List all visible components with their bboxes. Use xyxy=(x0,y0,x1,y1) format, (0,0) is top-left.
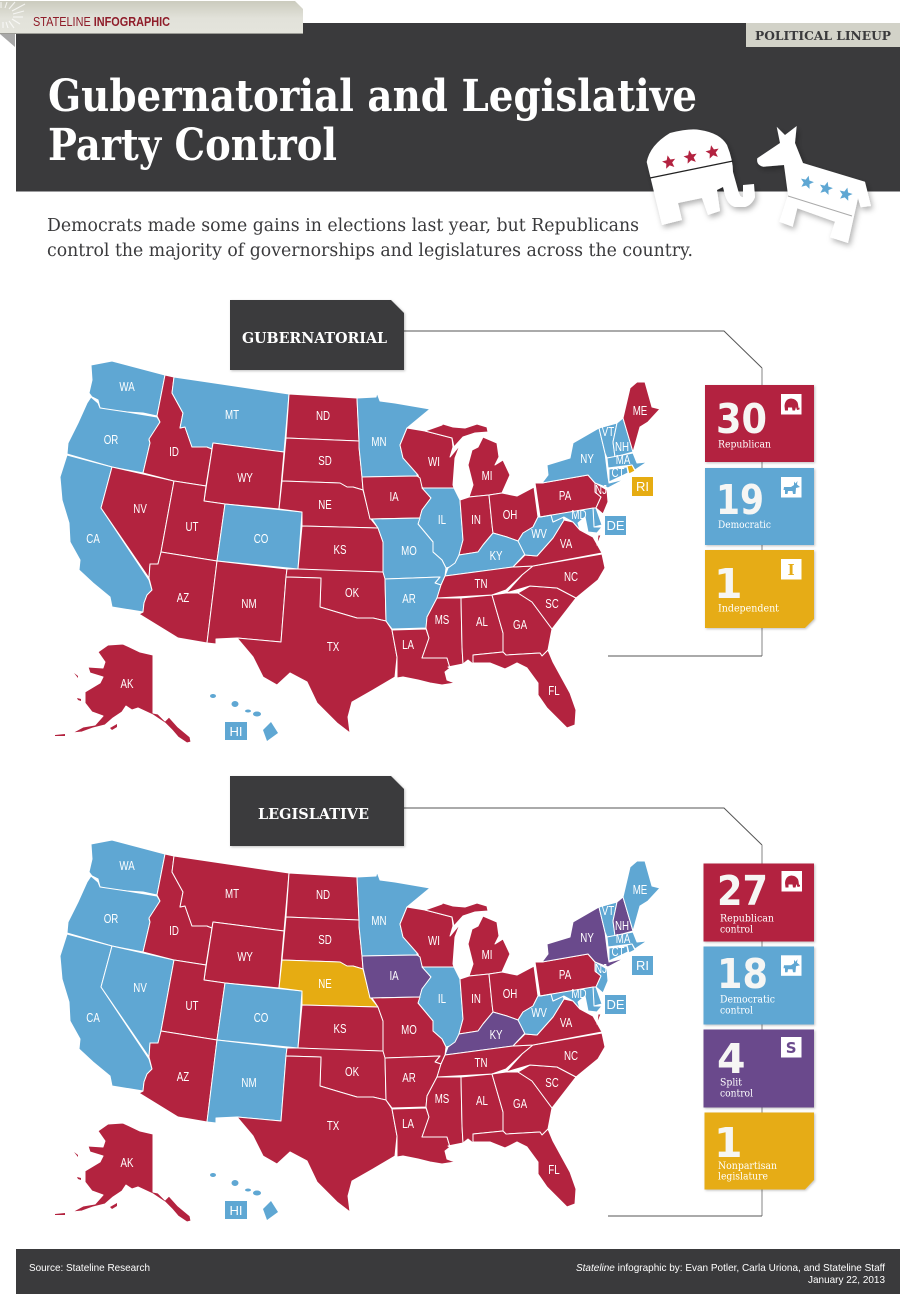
stat: 1 independent xyxy=(705,550,814,628)
state labels: VA xyxy=(560,538,573,551)
state: FL xyxy=(473,1129,576,1207)
state: NY xyxy=(542,907,625,967)
stat: 4 split control xyxy=(704,1030,814,1108)
state: PA xyxy=(535,475,601,517)
state: CT xyxy=(609,946,628,961)
label: HI xyxy=(225,722,247,740)
state: NJ xyxy=(595,483,608,514)
stat: 18 democratic control: 18 xyxy=(717,950,768,998)
state labels: AZ xyxy=(177,592,189,605)
state labels: AK xyxy=(121,1157,134,1170)
state: SC xyxy=(518,1065,576,1108)
state labels: NE xyxy=(318,978,332,991)
stat: 30 republican xyxy=(705,385,814,462)
state labels: NV xyxy=(133,503,147,516)
connector: legislative xyxy=(404,808,762,1216)
state labels: TX xyxy=(327,1120,340,1133)
credits: Stateline infographic by: Evan Potler, Carla Uriona, and Stateline Staff xyxy=(576,1263,885,1274)
ribbon: stateline infographic: STATELINE INFOGRAPHIC xyxy=(33,14,171,29)
state: TN xyxy=(437,566,533,598)
icon: elephant xyxy=(782,871,802,892)
state: ME xyxy=(623,861,660,931)
stat: 18 democratic control: Democratic xyxy=(720,994,775,1006)
icon: split: S xyxy=(786,1039,797,1057)
connector: gubernatorial xyxy=(404,331,762,656)
state: AR xyxy=(385,577,441,629)
title: Party Control xyxy=(48,120,337,171)
stat: 1 independent: Independent xyxy=(718,604,779,614)
state: WY xyxy=(204,443,284,509)
state: GA xyxy=(492,1072,552,1135)
state: VA xyxy=(513,999,602,1046)
stat: 27 republican control xyxy=(704,864,814,942)
state: VT xyxy=(599,423,617,458)
state: OR xyxy=(67,397,160,473)
state labels: IL xyxy=(438,514,446,527)
label: RI xyxy=(632,477,653,496)
icon: donkey xyxy=(781,955,802,976)
state: IN xyxy=(459,495,493,555)
state labels: GA xyxy=(513,1098,528,1111)
state labels: MO xyxy=(401,1024,417,1037)
heading: gubernatorial: GUBERNATORIAL xyxy=(242,329,387,347)
state: MI upper xyxy=(425,416,488,447)
label: HI xyxy=(225,1201,247,1219)
heading: legislative: LEGISLATIVE xyxy=(258,805,369,823)
label: HI: HI xyxy=(230,1203,242,1218)
state labels: KS xyxy=(334,544,346,557)
state: DE xyxy=(593,987,602,1006)
state: KY xyxy=(445,533,526,576)
state labels: CT xyxy=(612,946,625,959)
credits xyxy=(576,1263,885,1286)
state labels: NY xyxy=(580,453,594,466)
state labels xyxy=(86,381,647,698)
state: MD xyxy=(540,987,602,1012)
state: SC xyxy=(518,586,576,629)
state: VT xyxy=(599,902,617,937)
state: AZ xyxy=(139,1031,217,1122)
state labels: WI xyxy=(428,935,440,948)
state labels: MA xyxy=(616,454,631,467)
state: OK xyxy=(286,1048,386,1100)
state: LA xyxy=(392,1108,455,1164)
state labels: CA xyxy=(86,533,100,546)
state labels: FL xyxy=(548,685,560,698)
state: MI xyxy=(468,916,510,976)
state labels: ME xyxy=(633,884,647,897)
state: MN xyxy=(357,393,430,477)
state labels: MD xyxy=(571,509,587,522)
state: MT xyxy=(172,377,289,452)
state: UT xyxy=(161,481,225,561)
state labels: VT xyxy=(602,905,614,918)
state: WA xyxy=(89,361,165,416)
state labels: MO xyxy=(401,545,417,558)
state labels: OH xyxy=(503,988,517,1001)
state labels: WY xyxy=(237,951,253,964)
state labels: MN xyxy=(371,915,387,928)
state: ND xyxy=(286,394,359,441)
state labels: SD xyxy=(318,455,332,468)
icon: independent: I xyxy=(788,561,795,579)
state: VA xyxy=(513,520,602,567)
state: AL xyxy=(461,1074,503,1143)
state labels: WV xyxy=(531,528,547,541)
state: MO xyxy=(372,518,446,585)
state: CO xyxy=(217,983,302,1048)
state: SD xyxy=(282,917,363,969)
label: RI: RI xyxy=(636,479,649,494)
state: NM xyxy=(207,1040,287,1123)
state: IL xyxy=(418,488,463,568)
state labels: NY xyxy=(580,932,594,945)
state: IA xyxy=(362,955,431,998)
state: TX xyxy=(237,1056,397,1212)
state: AR xyxy=(385,1056,441,1108)
state: WV xyxy=(518,515,564,556)
state: IL xyxy=(418,967,463,1047)
state labels: NH xyxy=(615,441,629,454)
stat: 19 democratic: Democratic xyxy=(718,520,771,531)
state: MO xyxy=(372,997,446,1064)
state: ME xyxy=(623,382,660,452)
stat: 18 democratic control xyxy=(704,946,814,1024)
state: MA xyxy=(607,932,647,949)
hawaii islands xyxy=(210,694,278,741)
label: DE xyxy=(605,995,626,1014)
stat: 1 nonpartisan legislature: 1 xyxy=(714,1119,743,1167)
state: VA eastern shore xyxy=(597,535,601,545)
state labels: TX xyxy=(327,641,340,654)
state: ID xyxy=(143,854,212,965)
stat: 1 nonpartisan legislature xyxy=(704,1112,814,1190)
state: MI xyxy=(468,437,510,497)
state: NV xyxy=(101,467,174,578)
state: CA xyxy=(60,455,152,612)
alaska islands xyxy=(55,1152,117,1215)
state: CT xyxy=(609,467,628,482)
state labels: VA xyxy=(560,1017,573,1030)
state: NH xyxy=(613,418,633,457)
title xyxy=(48,71,697,171)
state labels: FL xyxy=(548,1164,560,1177)
state: NY xyxy=(542,428,625,488)
stat: 30 republican: Republican xyxy=(718,440,772,450)
hawaii islands xyxy=(210,1173,278,1220)
tab: political lineup: POLITICAL LINEUP xyxy=(755,28,892,43)
state labels: CO xyxy=(254,1012,269,1025)
state labels: WA xyxy=(119,860,135,873)
state: KS xyxy=(298,526,383,572)
state labels: UT xyxy=(186,521,199,534)
icon: elephant xyxy=(781,394,802,414)
state labels: IA xyxy=(389,491,399,504)
state labels: MA xyxy=(616,933,631,946)
state labels: MN xyxy=(371,436,387,449)
stat: 4 split control: control xyxy=(720,1088,753,1100)
state labels: PA xyxy=(559,969,572,982)
state labels: NC xyxy=(564,571,578,584)
state labels: NM xyxy=(241,1077,257,1090)
state labels: LA xyxy=(402,639,414,652)
state: MN xyxy=(357,872,430,956)
state: WA xyxy=(89,840,165,895)
stat: 1 nonpartisan legislature: legislature xyxy=(718,1172,768,1182)
label: RI xyxy=(632,956,653,975)
state labels: MS xyxy=(435,1093,449,1106)
state labels: NE xyxy=(318,499,332,512)
state: CA xyxy=(60,934,152,1091)
intro text: Democrats made some gains in elections last year, but Republicans xyxy=(47,216,639,236)
icon: republican elephant xyxy=(647,129,755,225)
stat: 1 nonpartisan legislature: Nonpartisan xyxy=(718,1161,778,1172)
stat: 4 split control: Split xyxy=(720,1078,742,1088)
state: GA xyxy=(492,593,552,656)
heading: legislative xyxy=(230,776,404,846)
stat: 27 republican control: 27 xyxy=(717,867,768,915)
state labels: LA xyxy=(402,1118,414,1131)
state labels: NJ xyxy=(595,484,607,497)
stat: 27 republican control: control xyxy=(720,924,753,936)
state labels: WV xyxy=(531,1007,547,1020)
heading: gubernatorial xyxy=(230,300,404,370)
label: HI: HI xyxy=(230,724,242,739)
state: CO xyxy=(217,504,302,569)
state labels: SC xyxy=(545,1077,559,1090)
intro text xyxy=(47,216,693,261)
state: NC xyxy=(506,554,605,598)
state: NC xyxy=(506,1033,605,1077)
state labels: AL xyxy=(476,616,488,629)
stat: 4 split control: 4 xyxy=(717,1035,746,1083)
state: OH xyxy=(489,487,538,541)
state: NV xyxy=(101,946,174,1057)
state: MS xyxy=(422,1077,463,1147)
state: NE xyxy=(279,481,378,528)
state: AK xyxy=(72,644,191,743)
stat: 30 republican: 30 xyxy=(716,395,767,443)
state: RI xyxy=(627,465,635,474)
state labels: OR xyxy=(104,434,118,447)
state labels: NC xyxy=(564,1050,578,1063)
footer xyxy=(16,1249,900,1294)
state: VA eastern shore xyxy=(597,1014,601,1024)
tab: political lineup xyxy=(746,23,900,47)
state: MA xyxy=(607,453,647,470)
state: NM xyxy=(207,561,287,644)
state labels: AZ xyxy=(177,1071,189,1084)
state: IA xyxy=(362,476,431,519)
state: LA xyxy=(392,629,455,685)
state: NH xyxy=(613,897,633,936)
icon: donkey xyxy=(781,477,802,498)
state labels: CA xyxy=(86,1012,100,1025)
state labels: KS xyxy=(334,1023,346,1036)
state labels: MD xyxy=(571,988,587,1001)
state labels: NJ xyxy=(595,963,607,976)
source: Source: Stateline Research xyxy=(29,1263,150,1274)
stat: 18 democratic control: control xyxy=(720,1006,753,1016)
state labels: ID xyxy=(169,925,179,938)
title banner xyxy=(16,23,900,192)
state labels: AR xyxy=(402,593,416,606)
state: IN xyxy=(459,974,493,1034)
state: MD xyxy=(540,508,602,533)
state: WV xyxy=(518,994,564,1035)
state labels: ID xyxy=(169,446,179,459)
state labels: TN xyxy=(475,1057,487,1070)
state: AK xyxy=(72,1123,191,1222)
state labels: SC xyxy=(545,598,559,611)
state labels: WY xyxy=(237,472,253,485)
state: OH xyxy=(489,966,538,1020)
stat: 19 democratic: 19 xyxy=(716,476,764,524)
state: TX xyxy=(237,577,397,733)
map: legislative xyxy=(55,840,660,1222)
state labels: UT xyxy=(186,1000,199,1013)
ribbon: stateline infographic xyxy=(0,1,303,47)
state: NJ xyxy=(595,962,608,993)
state labels: NV xyxy=(133,982,147,995)
state labels: NM xyxy=(241,598,257,611)
state: OK xyxy=(286,569,386,621)
state: WY xyxy=(204,922,284,988)
state labels: KY xyxy=(490,1029,503,1042)
state labels xyxy=(86,860,647,1177)
state: PA xyxy=(535,954,601,996)
state labels: VT xyxy=(602,426,614,439)
state labels: ND xyxy=(316,410,330,423)
state: MS xyxy=(422,598,463,668)
state: FL xyxy=(473,650,576,728)
state labels: OK xyxy=(345,1066,360,1079)
state: WI xyxy=(400,428,460,488)
state labels: MI xyxy=(482,949,492,962)
state labels: WA xyxy=(119,381,135,394)
state labels: NH xyxy=(615,920,629,933)
state labels: ME xyxy=(633,405,647,418)
state labels: MT xyxy=(225,409,239,422)
label: DE xyxy=(605,516,626,535)
state: AZ xyxy=(139,552,217,643)
state labels: MS xyxy=(435,614,449,627)
state labels: IN xyxy=(471,993,481,1006)
state labels: MT xyxy=(225,888,239,901)
state labels: AL xyxy=(476,1095,488,1108)
label: DE: DE xyxy=(606,997,625,1012)
state: UT xyxy=(161,960,225,1040)
state: AL xyxy=(461,595,503,664)
state: WI xyxy=(400,907,460,967)
icon: democratic donkey xyxy=(757,126,871,243)
state labels: GA xyxy=(513,619,528,632)
state labels: CT xyxy=(612,467,625,480)
state: KS xyxy=(298,1005,383,1051)
state: RI xyxy=(627,944,635,953)
state: TN xyxy=(437,1045,533,1077)
alaska islands xyxy=(55,673,117,736)
state labels: WI xyxy=(428,456,440,469)
state: ID xyxy=(143,375,212,486)
state: OR xyxy=(67,876,160,952)
state labels: IN xyxy=(471,514,481,527)
state labels: AR xyxy=(402,1072,416,1085)
state labels: SD xyxy=(318,934,332,947)
state: SD xyxy=(282,438,363,490)
label: RI: RI xyxy=(636,958,649,973)
state: ND xyxy=(286,873,359,920)
state: MI upper xyxy=(425,895,488,926)
state labels: MI xyxy=(482,470,492,483)
state: KY xyxy=(445,1012,526,1055)
stat: 27 republican control: Republican xyxy=(720,914,775,924)
state labels: OR xyxy=(104,913,118,926)
state labels: IL xyxy=(438,993,446,1006)
state labels: KY xyxy=(490,550,503,563)
state labels: OK xyxy=(345,587,360,600)
label: DE: DE xyxy=(606,518,625,533)
map: gubernatorial xyxy=(55,361,660,743)
state: DE xyxy=(593,508,602,527)
state labels: TN xyxy=(475,578,487,591)
state labels: ND xyxy=(316,889,330,902)
state labels: AK xyxy=(121,678,134,691)
credits: January 22, 2013 xyxy=(808,1275,885,1286)
state labels: PA xyxy=(559,490,572,503)
stat: 19 democratic xyxy=(705,468,814,545)
state: NE xyxy=(279,960,378,1007)
state: MT xyxy=(172,856,289,931)
intro text: control the majority of governorships and legislatures across the country. xyxy=(47,241,693,261)
state labels: IA xyxy=(389,970,399,983)
state labels: OH xyxy=(503,509,517,522)
title: Gubernatorial and Legislative xyxy=(48,71,697,122)
stat: 1 independent: 1 xyxy=(714,560,743,608)
state labels: CO xyxy=(254,533,269,546)
